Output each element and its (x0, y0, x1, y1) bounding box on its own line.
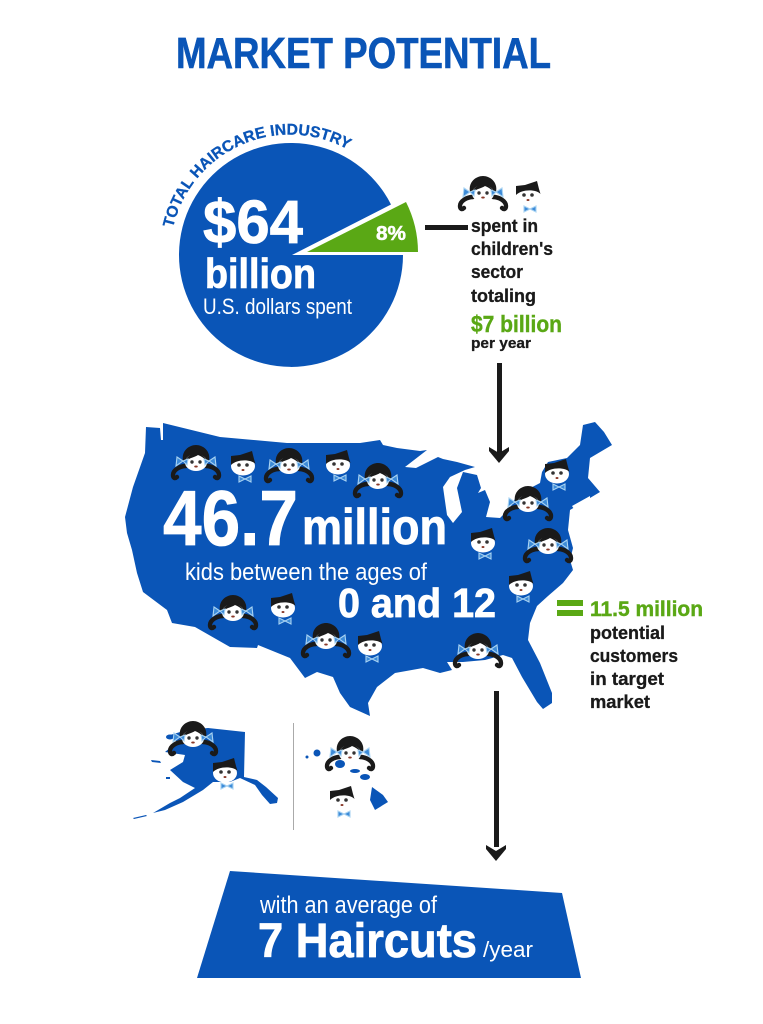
text block: 46.7 million kids (163, 474, 496, 626)
text block: 46.7 million kids: kids between the ages of (185, 559, 427, 586)
icon: girl and boy (460, 176, 540, 212)
text block: children's sector: totaling (471, 286, 536, 306)
text block: potential customers: 11.5 million (590, 598, 703, 621)
text block: potential customers (590, 598, 703, 712)
panel: pie chart (162, 124, 418, 367)
map: Hawaii (306, 750, 388, 810)
map detail: Long Island sound (572, 496, 590, 509)
text block: children's sector: per year (471, 335, 531, 352)
pie green 8% slice (307, 202, 418, 252)
text block: potential customers: potential (590, 623, 665, 643)
text block: potential customers: in target (590, 669, 664, 689)
with an average of: with an average of (259, 892, 437, 919)
text block: potential customers: customers (590, 646, 678, 666)
map kids: girls and boys (173, 445, 571, 666)
7 Haircuts: 7 Haircuts (258, 915, 477, 968)
text block: children's sector: $7 billion (471, 311, 562, 337)
text block: children's sector (471, 216, 562, 352)
billion: billion (205, 250, 316, 297)
text block: children's sector: children's (471, 239, 553, 259)
title: MARKET POTENTIAL (176, 29, 551, 78)
curved label: total haircare industry: TOTAL HAIRCARE INDUSTRY (162, 124, 353, 226)
panel: haircuts banner (197, 871, 581, 978)
$64: $64 (203, 188, 303, 256)
text block: children's sector: sector (471, 262, 523, 282)
pie main blue segment (179, 143, 403, 367)
map: Alaska (133, 728, 278, 819)
text block: potential customers: market (590, 692, 650, 712)
U.S. dollars spent: U.S. dollars spent (203, 294, 352, 319)
per year: /year (483, 937, 533, 962)
arrow: to haircuts (486, 691, 506, 861)
equals sign (557, 600, 583, 616)
connector line (425, 225, 468, 230)
Alaska and Hawaii kids (170, 721, 373, 817)
map: contiguous US (125, 422, 612, 716)
divider (293, 723, 294, 830)
arrow: to map (489, 363, 509, 463)
text block: 46.7 million kids: 0 and 12 (338, 580, 496, 626)
text block: children's sector: spent in (471, 216, 538, 236)
text block: 46.7 million kids: million (302, 499, 447, 555)
8% label: 8% (376, 223, 406, 245)
text block: 46.7 million kids: 46.7 (163, 474, 298, 562)
